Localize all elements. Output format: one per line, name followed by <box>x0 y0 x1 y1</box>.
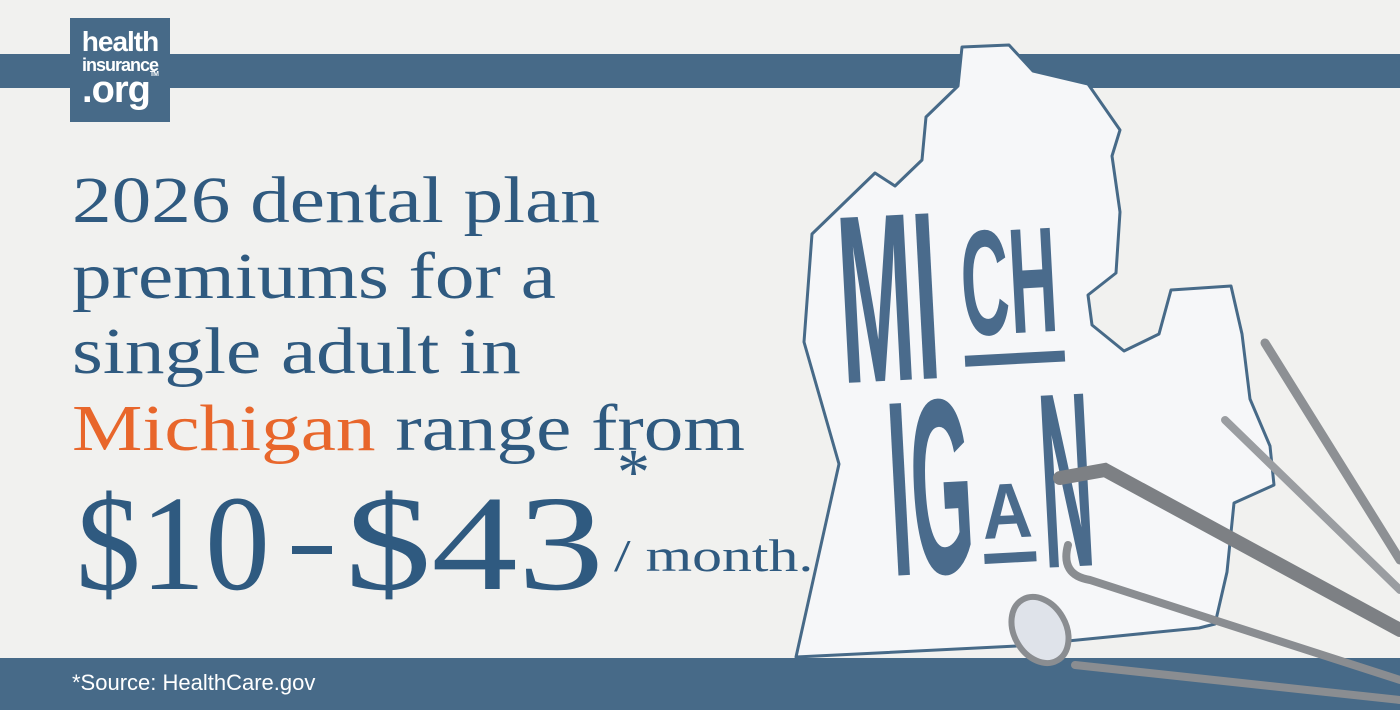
per month: / month. <box>614 530 813 581</box>
bottom band <box>0 658 1400 710</box>
price range: $10 <box>76 469 270 619</box>
dental instruments <box>1000 343 1400 700</box>
logo: health <box>82 26 158 57</box>
top band <box>0 54 1400 88</box>
state name MICH IGAN: A <box>980 465 1034 556</box>
price range: $43 <box>345 469 604 619</box>
headline <box>72 164 745 465</box>
price range <box>76 469 604 619</box>
state name MICH IGAN: MI <box>832 161 946 434</box>
state name MICH IGAN: CH <box>957 195 1061 368</box>
headline: Michigan range from <box>72 392 745 465</box>
logo: insurance <box>82 55 158 75</box>
logo <box>70 18 170 122</box>
state name MICH IGAN <box>832 154 1100 631</box>
source footnote: *Source: HealthCare.gov <box>72 670 315 695</box>
asterisk: * <box>617 436 650 509</box>
logo: .orgTM <box>82 69 158 111</box>
state name MICH IGAN: IG <box>881 346 980 629</box>
michigan map: N <box>1033 339 1100 621</box>
headline: single adult in <box>72 315 521 388</box>
headline: 2026 dental plan <box>72 164 600 237</box>
headline: premiums for a <box>72 240 556 313</box>
map shape <box>796 45 1274 657</box>
